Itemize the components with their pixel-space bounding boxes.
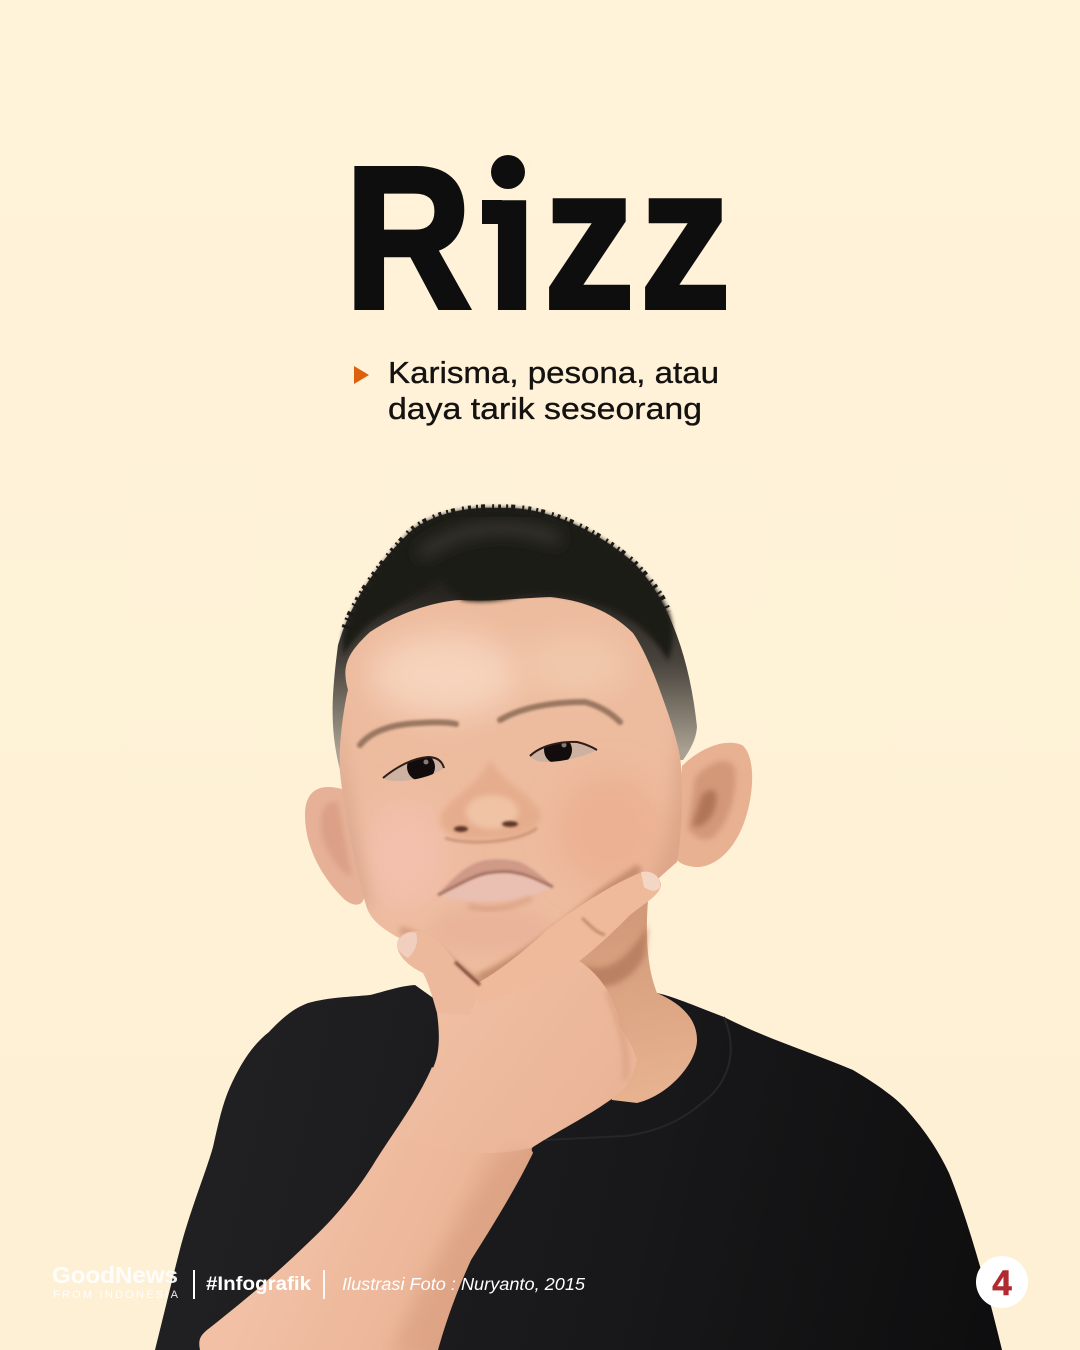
knuckle and hand shading bbox=[582, 918, 605, 935]
definition block bbox=[354, 355, 728, 426]
left eye bbox=[383, 753, 444, 781]
logo: GoodNews: FROM INDONESIA bbox=[53, 1289, 179, 1301]
eyebrows bbox=[360, 702, 620, 745]
definition text: daya tarik seseorang bbox=[388, 391, 702, 426]
forearm bbox=[199, 1067, 533, 1350]
right ear bbox=[675, 743, 752, 867]
title: z bbox=[640, 125, 730, 351]
face bbox=[340, 597, 682, 983]
temple shade bbox=[340, 762, 370, 906]
cheek blush bbox=[368, 806, 444, 904]
collar stitching bbox=[545, 1017, 731, 1140]
title: z bbox=[544, 125, 634, 351]
fist bbox=[395, 960, 637, 1153]
page number badge bbox=[976, 1256, 1028, 1308]
page number badge: 4 bbox=[992, 1264, 1012, 1303]
right side shade bbox=[651, 744, 682, 878]
title: i bbox=[486, 125, 539, 352]
forearm and hand bbox=[199, 872, 661, 1350]
left ear bbox=[305, 787, 364, 905]
jaw shadow along finger bbox=[480, 868, 640, 978]
photo credit: Ilustrasi Foto : Nuryanto, 2015 bbox=[342, 1274, 585, 1294]
right eye bbox=[529, 740, 598, 762]
logo: GoodNews: GoodNews bbox=[52, 1262, 178, 1288]
title: R bbox=[345, 126, 472, 351]
definition text: Karisma, pesona, atau bbox=[388, 355, 719, 390]
mouth bbox=[438, 859, 553, 909]
icon: orange bullet triangle bbox=[354, 366, 369, 384]
neck bbox=[560, 900, 697, 1103]
forehead highlight bbox=[370, 633, 520, 717]
photo: thinking boy in black t-shirt bbox=[155, 508, 1002, 1350]
thumb nail bbox=[397, 932, 417, 958]
dark hair bbox=[343, 508, 673, 660]
black t-shirt bbox=[155, 985, 1002, 1350]
jaw shadow above thumb bbox=[398, 926, 468, 970]
thumb bbox=[397, 931, 482, 1015]
title bbox=[345, 125, 730, 352]
logo: GoodNews bbox=[52, 1262, 179, 1301]
head fade hair bbox=[333, 508, 697, 770]
hashtag: #Infografik bbox=[206, 1274, 311, 1295]
nose bbox=[440, 760, 541, 842]
finger nail bbox=[641, 872, 660, 891]
footer bar bbox=[52, 1262, 585, 1301]
index finger bbox=[473, 872, 661, 1005]
